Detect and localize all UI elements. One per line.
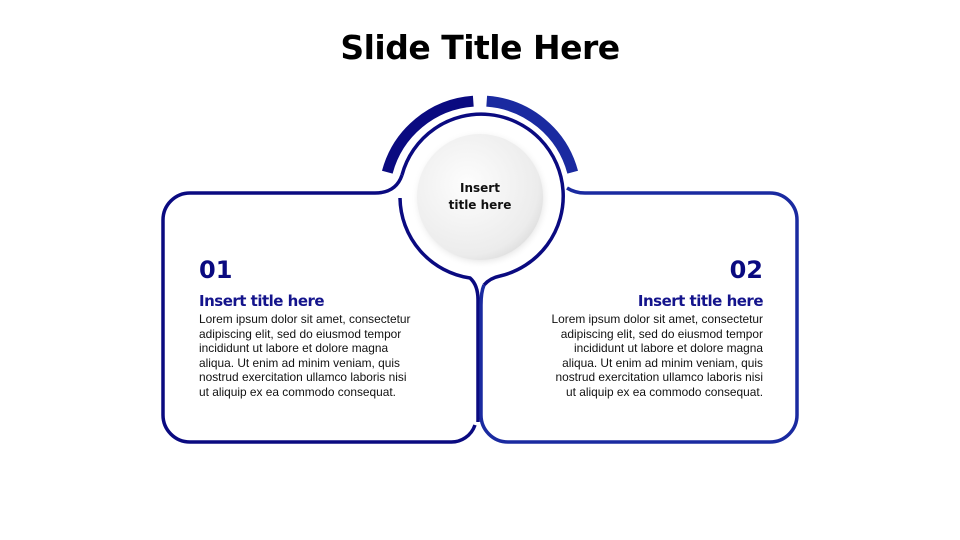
text: panel 2	[552, 256, 763, 399]
text: panel 2: 02	[730, 256, 763, 284]
text: panel 1	[199, 256, 410, 399]
center circle	[411, 129, 551, 269]
arc: left	[387, 101, 473, 172]
panel: left outline	[163, 175, 478, 442]
text: panel 2: Insert title here	[638, 292, 763, 310]
center circle: title here	[449, 198, 511, 212]
arc: right	[487, 101, 573, 172]
text: panel 1: 01	[199, 256, 232, 284]
title: Slide Title Here	[340, 28, 620, 67]
text: panel 2: Lorem ipsum dolor sit amet, consectetur adipiscing elit, sed do eiusmod tempor incididunt ut labore et dolore magna aliqua. Ut enim ad minim veniam, quis nostrud exercitation ullamco laboris nisi ut aliquip ex ea commodo consequat.	[552, 312, 763, 399]
text: panel 1: Insert title here	[199, 292, 324, 310]
text: panel 1: Lorem ipsum dolor sit amet, consectetur adipiscing elit, sed do eiusmod tempor incididunt ut labore et dolore magna aliqua. Ut enim ad minim veniam, quis nostrud exercitation ullamco laboris nisi ut aliquip ex ea commodo consequat.	[199, 312, 410, 399]
panel: right outline	[402, 114, 797, 442]
center circle: Insert	[460, 181, 500, 195]
